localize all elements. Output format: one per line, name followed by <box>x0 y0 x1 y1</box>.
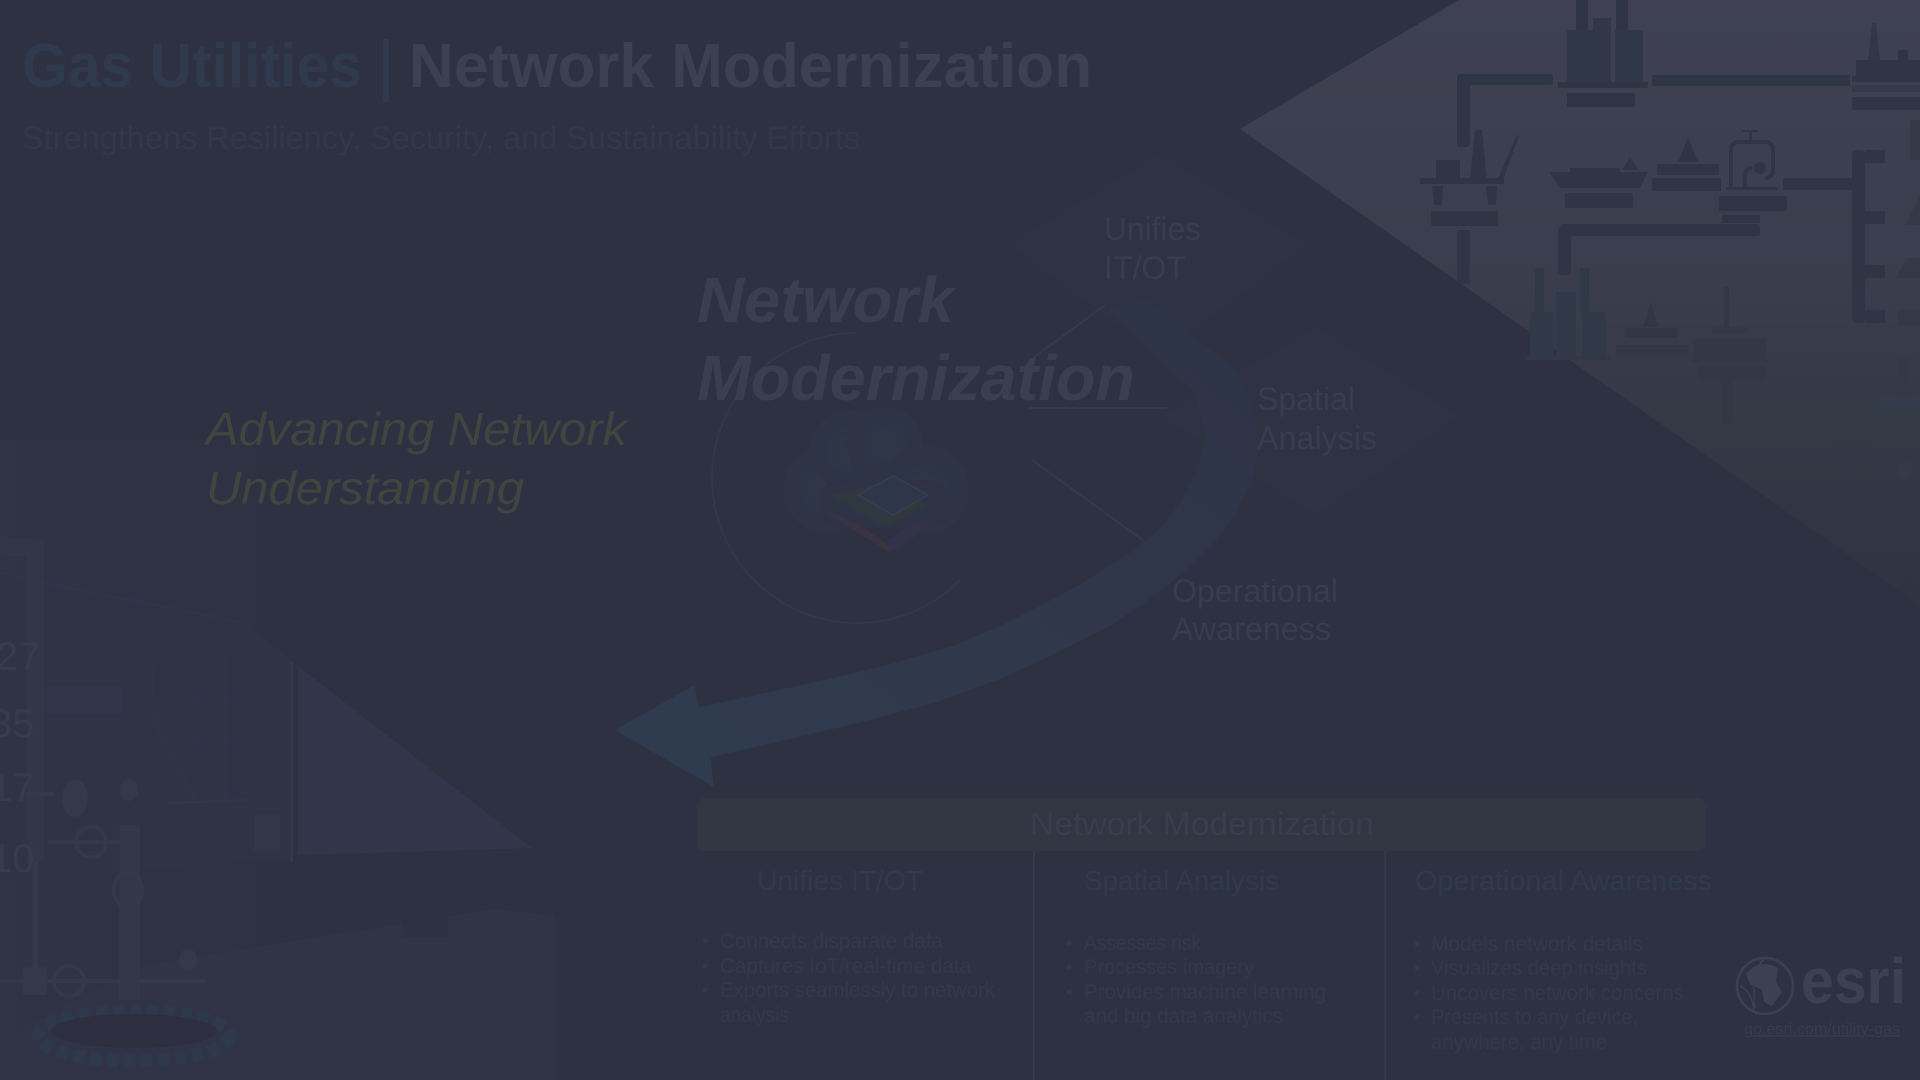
column: Operational Awareness: Presents to any device, <box>1431 1006 1638 1029</box>
monitor top edge <box>0 572 241 622</box>
monitor screen <box>0 570 291 880</box>
heading: Network Modernization: Modernization <box>697 342 1135 414</box>
label: Unifies IT/OT <box>1104 211 1201 286</box>
table header: Network Modernization <box>1030 806 1374 842</box>
illustration: gas pipeline network <box>1420 0 1920 480</box>
label: Operational Awareness: Operational <box>1172 573 1338 609</box>
icon: globe <box>1737 958 1793 1014</box>
link: go.esri.com/utility-gas <box>1744 1021 1900 1038</box>
green layer <box>830 485 928 528</box>
diagram: modernization cycle <box>616 155 1458 786</box>
column: Operational Awareness: Uncovers network concerns <box>1431 982 1684 1005</box>
refinery <box>1526 268 1610 360</box>
title <box>22 32 1092 102</box>
orbit ring <box>712 333 960 623</box>
heading: Advancing Network Understanding: Advancing Network <box>203 403 629 455</box>
label: Spatial Analysis: Analysis <box>1257 420 1377 456</box>
petrochemicals <box>1691 287 1768 380</box>
burner flames <box>38 1011 230 1061</box>
left tint <box>0 440 300 1080</box>
heading: Network Modernization <box>697 264 1135 414</box>
column: Operational Awareness: Models network details <box>1431 933 1643 956</box>
column: Operational Awareness: Operational Awareness <box>1415 865 1712 896</box>
label: Spatial Analysis: Spatial <box>1257 381 1355 417</box>
blue tile <box>858 476 928 515</box>
column: Spatial Analysis: Spatial Analysis <box>1084 865 1279 896</box>
column: Operational Awareness: anywhere, any time <box>1431 1031 1607 1054</box>
column: Unifies IT/OT: Exports seamlessly to network <box>720 979 995 1002</box>
title: Network Modernization: Network Modernization <box>409 32 1092 101</box>
column: Unifies IT/OT: Captures IoT/real-time data <box>720 955 971 978</box>
title divider <box>383 39 389 102</box>
column: Operational Awareness: Visualizes deep insights <box>1431 957 1647 980</box>
heading: Advancing Network Understanding <box>203 403 629 514</box>
gas plant <box>1558 0 1648 107</box>
panel: top-right triangle <box>1240 0 1920 605</box>
purple layer <box>888 515 928 553</box>
desk <box>0 909 555 1080</box>
column: Unifies IT/OT: analysis <box>720 1004 789 1027</box>
column: Spatial Analysis: Processes imagery <box>1084 956 1254 979</box>
table header <box>697 798 1706 851</box>
logo: esri <box>1737 945 1906 1038</box>
subtitle: Strengthens Resiliency, Security, and Sustainability Efforts <box>22 120 860 156</box>
offshore rig <box>1420 130 1519 226</box>
label: Unifies IT/OT: Unifies <box>1104 211 1201 247</box>
triangle map <box>298 666 532 855</box>
column: Spatial Analysis: and big data analytics <box>1084 1005 1283 1028</box>
heading: Advancing Network Understanding: Understanding <box>206 462 524 514</box>
column: Unifies IT/OT <box>702 865 995 1027</box>
dashboard numbers <box>0 635 40 881</box>
column: Operational Awareness <box>1414 865 1712 1054</box>
ship <box>1549 157 1648 208</box>
diamonds behind labels <box>1010 155 1458 690</box>
label: Operational Awareness: Awareness <box>1172 611 1331 647</box>
curved arrow <box>616 299 1259 786</box>
label: Operational Awareness <box>1172 573 1338 647</box>
column: Spatial Analysis: Assesses risk <box>1084 932 1201 955</box>
connector lines <box>1029 305 1167 541</box>
storage <box>1657 137 1719 175</box>
column: Unifies IT/OT: Unifies IT/OT <box>757 865 923 896</box>
column: Unifies IT/OT: Connects disparate data <box>720 930 943 953</box>
column: Spatial Analysis <box>1066 865 1326 1028</box>
distant icons <box>1835 120 1920 480</box>
gas field platform <box>1852 23 1920 110</box>
labels <box>1104 211 1377 647</box>
gas pipe assembly <box>0 539 205 1000</box>
screen panel <box>46 687 122 713</box>
panel: summary table <box>697 798 1712 1080</box>
column: Spatial Analysis: Provides machine learning <box>1084 981 1326 1004</box>
icon: cloud and map layers <box>783 407 969 553</box>
pipes <box>1457 74 1885 426</box>
wordmark: esri <box>1801 945 1906 1017</box>
label: Spatial Analysis <box>1257 381 1377 456</box>
cone tank <box>1625 303 1678 338</box>
cloud <box>783 407 969 534</box>
gas treatment valve <box>1719 130 1787 211</box>
chart panel on screen <box>152 650 280 850</box>
monitor frame and stand <box>290 662 555 937</box>
red layer <box>823 510 930 553</box>
title: Gas Utilities: Gas Utilities <box>22 32 362 101</box>
label: Unifies IT/OT: IT/OT <box>1104 250 1186 286</box>
illustration: laptop, gas valves and burner <box>0 539 555 1080</box>
heading: Network Modernization: Network <box>697 264 957 336</box>
